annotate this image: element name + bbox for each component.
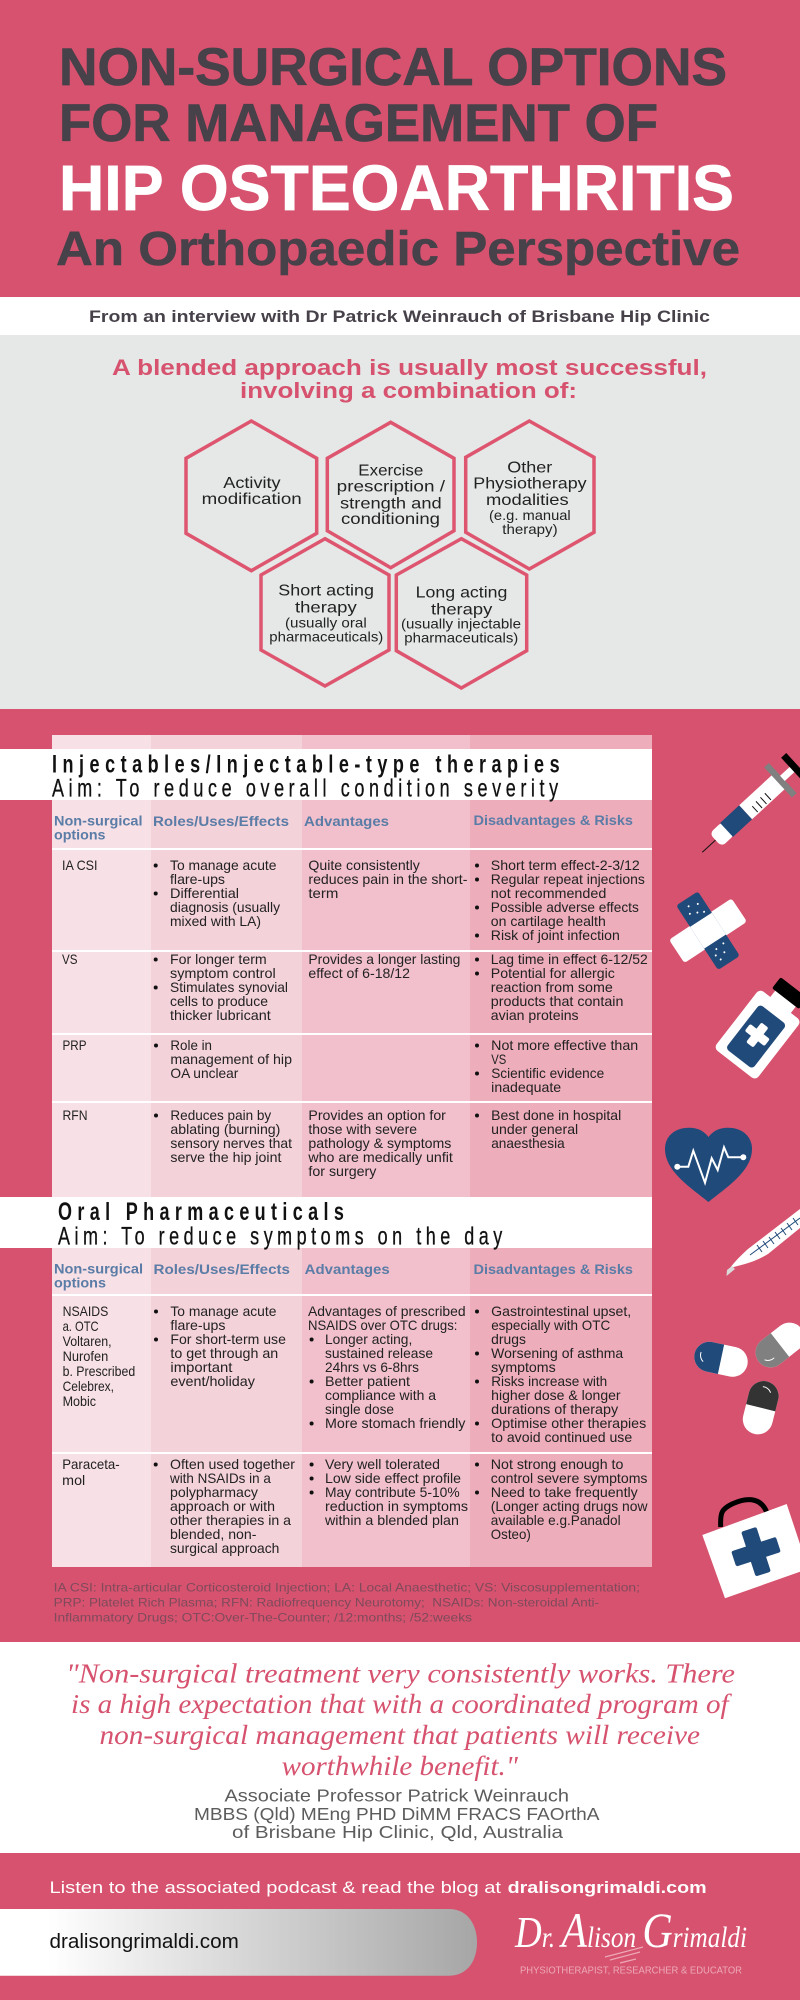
- row: NSAIDS: sustained release: [325, 1346, 433, 1361]
- row: NSAIDS: 24hrs vs 6-8hrs: [325, 1360, 419, 1375]
- table 2 header row: [54, 1261, 633, 1290]
- row: RFN: RFN: [62, 1108, 88, 1123]
- hexagon: other physiotherapy modalities: Physiotherapy: [473, 475, 587, 492]
- table 1 header row: Disadvantages & Risks: [474, 813, 633, 828]
- row: Paracetamol: polypharmacy: [170, 1485, 258, 1500]
- row: VS: symptom control: [170, 966, 276, 981]
- hexagon: exercise prescription: Exercise: [358, 462, 423, 479]
- row: PRP: PRP: [62, 1038, 86, 1053]
- row: PRP: Not more effective than: [491, 1038, 638, 1053]
- title block: [56, 38, 740, 276]
- row: NSAIDS: NSAIDS: [63, 1304, 108, 1319]
- hexagon: exercise prescription: conditioning: [341, 511, 440, 528]
- row: PRP: Role in: [170, 1038, 212, 1053]
- quote attribution: Associate Professor Patrick Weinrauch: [224, 1786, 569, 1806]
- heading: oral pharmaceuticals: Oral Pharmaceuticals: [58, 1197, 344, 1226]
- hexagon: activity modification: modification: [202, 491, 302, 508]
- row: PRP: Scientific evidence: [491, 1066, 605, 1081]
- blended approach heading: involving a combination of:: [240, 378, 577, 403]
- row: NSAIDS: Optimise other therapies: [491, 1416, 646, 1431]
- logo: Dr. Alison Grimaldi: Dr. Alison Grimaldi: [514, 1902, 747, 1958]
- podcast call to action: dralisongrimaldi.com: [508, 1878, 707, 1897]
- row: Paracetamol: other therapies in a: [170, 1513, 291, 1528]
- row: Paracetamol: [62, 1457, 648, 1556]
- row: Paracetamol: Osteo): [491, 1527, 531, 1542]
- row: Paracetamol: blended, non-: [170, 1527, 256, 1542]
- quote attribution: [194, 1786, 600, 1842]
- row: VS: [62, 952, 648, 1023]
- logo: Dr. Alison Grimaldi: PHYSIOTHERAPIST, RESEARCHER & EDUCATOR: [520, 1965, 742, 1977]
- hexagon: exercise prescription: strength and: [340, 495, 442, 512]
- hexagon: short acting therapy: [261, 539, 389, 686]
- table 2 header row: Roles/Uses/Effects: [154, 1262, 290, 1277]
- row: RFN: for surgery: [308, 1164, 376, 1179]
- table 1 header row: Non-surgical: [54, 813, 142, 828]
- icon: thermometer: [726, 1209, 800, 1276]
- row: PRP: management of hip: [170, 1052, 292, 1067]
- row: NSAIDS: Celebrex,: [63, 1379, 114, 1394]
- row: NSAIDS: important: [170, 1360, 233, 1375]
- row: NSAIDS: For short-term use: [170, 1332, 286, 1347]
- row: RFN: Reduces pain by: [170, 1108, 271, 1123]
- row: NSAIDS: Longer acting,: [325, 1332, 412, 1347]
- abbreviations footnote: [54, 1581, 640, 1625]
- table 1 header row: options: [54, 827, 106, 842]
- row: Paracetamol: available e.g.Panadol: [491, 1513, 621, 1528]
- row: Paracetamol: Very well tolerated: [325, 1457, 440, 1472]
- heading: injectables: Aim: To reduce overall condition severity: [52, 774, 558, 802]
- interview banner: [0, 297, 800, 335]
- hexagon: short acting therapy: pharmaceuticals): [269, 628, 383, 644]
- row: RFN: Best done in hospital: [491, 1108, 621, 1123]
- row: Paracetamol: within a blended plan: [324, 1513, 459, 1528]
- row: Paracetamol: May contribute 5-10%: [325, 1485, 460, 1500]
- icon: medicine bottle: [714, 971, 800, 1080]
- row: VS: For longer term: [170, 952, 267, 967]
- hexagon: other physiotherapy modalities: Other: [507, 459, 553, 476]
- row: VS: products that contain: [491, 994, 623, 1009]
- interview banner: From an interview with Dr Patrick Weinrauch of Brisbane Hip Clinic: [89, 307, 710, 326]
- row: IA CSI: flare-ups: [170, 872, 225, 887]
- row: Paracetamol: Paraceta-: [62, 1457, 120, 1472]
- row: IA CSI: To manage acute: [170, 858, 277, 873]
- hexagon: other physiotherapy modalities: modalities: [486, 492, 569, 509]
- row: NSAIDS: especially with OTC: [491, 1318, 610, 1333]
- row: VS: Potential for allergic: [491, 966, 615, 981]
- row: NSAIDS: NSAIDS over OTC drugs:: [308, 1318, 457, 1333]
- row: NSAIDS: durations of therapy: [491, 1402, 618, 1417]
- hexagon: short acting therapy: (usually oral: [285, 614, 367, 630]
- quote text: worthwhile benefit.": [282, 1751, 519, 1781]
- quote text: [66, 1659, 735, 1781]
- hexagon: other physiotherapy modalities: (e.g. manual: [489, 507, 571, 523]
- row: RFN: anaesthesia: [491, 1136, 565, 1151]
- row: IA CSI: Short term effect-2-3/12: [491, 858, 640, 873]
- table 2 header row: Disadvantages & Risks: [474, 1262, 633, 1277]
- icon: syringe: [688, 750, 800, 867]
- row: IA CSI: term: [308, 886, 338, 901]
- quote attribution: of Brisbane Hip Clinic, Qld, Australia: [232, 1822, 563, 1842]
- row: VS: VS: [62, 952, 78, 967]
- pill: dark and white: [740, 1378, 782, 1438]
- row: IA CSI: not recommended: [491, 886, 606, 901]
- title line 3: HIP OSTEOARTHRITIS: [59, 152, 734, 224]
- row: Paracetamol: with NSAIDs in a: [169, 1471, 271, 1486]
- website pill: dralisongrimaldi.com: [50, 1931, 239, 1953]
- icon: heart with ECG line: [665, 1128, 752, 1202]
- table 2 header row: Advantages: [305, 1262, 390, 1277]
- podcast call to action: Listen to the associated podcast & read the blog at: [50, 1878, 501, 1897]
- panel: quote: [0, 1642, 800, 1853]
- table 1 header row: Roles/Uses/Effects: [153, 814, 289, 829]
- row: VS: avian proteins: [491, 1008, 579, 1023]
- table 2 header row: Non-surgical: [54, 1261, 143, 1276]
- row: NSAIDS: Risks increase with: [491, 1374, 607, 1389]
- row: Paracetamol: Need to take frequently: [491, 1485, 638, 1500]
- row: IA CSI: Possible adverse effects: [491, 900, 639, 915]
- row: RFN: serve the hip joint: [170, 1150, 282, 1165]
- row: NSAIDS: symptoms: [491, 1360, 556, 1375]
- row: NSAIDS: drugs: [491, 1332, 526, 1347]
- row: Paracetamol: Often used together: [170, 1457, 295, 1472]
- heading: injectables: Injectables/Injectable-type therapies: [52, 749, 560, 778]
- row: NSAIDS: [63, 1304, 646, 1445]
- hexagon: long acting therapy: [396, 539, 527, 688]
- quote text: is a high expectation that with a coordinated program of: [71, 1689, 732, 1719]
- row: NSAIDS: to get through an: [170, 1346, 278, 1361]
- row: Paracetamol: mol: [62, 1473, 85, 1488]
- podcast call to action: [50, 1878, 707, 1897]
- title line 2: FOR MANAGEMENT OF: [59, 94, 658, 153]
- row: PRP: [62, 1038, 638, 1095]
- icon: pills: [691, 1317, 800, 1438]
- hexagon: exercise prescription: [327, 422, 454, 568]
- table 1 header row: [54, 813, 633, 842]
- quote text: "Non-surgical treatment very consistently works. There: [66, 1659, 735, 1689]
- icon: first aid kit: [702, 1500, 800, 1598]
- row: PRP: inadequate: [491, 1080, 562, 1095]
- website pill: [0, 1909, 477, 1976]
- row: RFN: Provides an option for: [308, 1108, 446, 1123]
- row: NSAIDS: to avoid continued use: [491, 1430, 633, 1445]
- row: RFN: ablating (burning): [170, 1122, 280, 1137]
- row: RFN: sensory nerves that: [170, 1136, 292, 1151]
- row: NSAIDS: Worsening of asthma: [491, 1346, 624, 1361]
- row: NSAIDS: To manage acute: [170, 1304, 277, 1319]
- row: Paracetamol: Not strong enough to: [491, 1457, 624, 1472]
- table 2 header row: options: [54, 1275, 106, 1290]
- hexagon: long acting therapy: (usually injectable: [401, 615, 521, 631]
- abbreviations footnote: PRP: Platelet Rich Plasma; RFN: Radiofrequency Neurotomy; NSAIDs: Non-steroidal Anti-: [54, 1596, 599, 1610]
- row: IA CSI: Differential: [170, 886, 239, 901]
- row: PRP: OA unclear: [170, 1066, 239, 1081]
- row: NSAIDS: Advantages of prescribed: [308, 1304, 466, 1319]
- title line 1: NON-SURGICAL OPTIONS: [59, 38, 727, 97]
- row: VS: cells to produce: [170, 994, 268, 1009]
- hexagon: long acting therapy: therapy: [431, 601, 492, 618]
- blended approach heading: A blended approach is usually most successful,: [112, 355, 707, 380]
- row: NSAIDS: Nurofen: [63, 1349, 108, 1364]
- row: NSAIDS: Gastrointestinal upset,: [491, 1304, 631, 1319]
- hexagon: long acting therapy: pharmaceuticals): [404, 629, 518, 645]
- hexagon: other physiotherapy modalities: [466, 421, 594, 569]
- heading: injectables: [0, 749, 652, 802]
- blended approach heading: [112, 355, 707, 403]
- row: NSAIDS: flare-ups: [170, 1318, 225, 1333]
- row: IA CSI: IA CSI: [62, 858, 98, 873]
- panel: options table background: [52, 735, 652, 1567]
- pill: grey and white: [749, 1317, 800, 1373]
- row: RFN: who are medically unfit: [307, 1150, 453, 1165]
- quote attribution: MBBS (Qld) MEng PHD DiMM FRACS FAOrthA: [194, 1804, 600, 1824]
- row: IA CSI: reduces pain in the short-: [308, 872, 467, 887]
- row: VS: Lag time in effect 6-12/52: [491, 952, 648, 967]
- row: NSAIDS: More stomach friendly: [325, 1416, 465, 1431]
- hexagon: other physiotherapy modalities: therapy): [502, 521, 558, 537]
- heading: oral pharmaceuticals: Aim: To reduce symptoms on the day: [58, 1221, 502, 1250]
- row: VS: reaction from some: [491, 980, 613, 995]
- row: IA CSI: Risk of joint infection: [491, 928, 620, 943]
- row: VS: thicker lubricant: [170, 1008, 271, 1023]
- row: IA CSI: Quite consistently: [308, 858, 420, 873]
- hexagon: short acting therapy: Short acting: [278, 583, 374, 600]
- row: Paracetamol: reduction in symptoms: [325, 1499, 468, 1514]
- row: Paracetamol: (Longer acting drugs now: [491, 1499, 648, 1514]
- hexagon: activity modification: [186, 421, 317, 571]
- row: Paracetamol: Low side effect profile: [325, 1471, 461, 1486]
- row: NSAIDS: higher dose & longer: [491, 1388, 621, 1403]
- row: IA CSI: Regular repeat injections: [491, 872, 645, 887]
- hexagon: short acting therapy: therapy: [295, 599, 357, 616]
- panel: blended approach: [0, 335, 800, 709]
- hexagon: activity modification: Activity: [223, 475, 281, 492]
- row: NSAIDS: event/holiday: [170, 1374, 255, 1389]
- abbreviations footnote: IA CSI: Intra-articular Corticosteroid Injection; LA: Local Anaesthetic; VS: Viscosupplementation;: [54, 1581, 640, 1595]
- heading: oral pharmaceuticals: [0, 1197, 652, 1250]
- row: NSAIDS: Mobic: [63, 1394, 96, 1409]
- row: VS: Stimulates synovial: [170, 980, 288, 995]
- row: VS: effect of 6-18/12: [308, 966, 410, 981]
- row: RFN: under general: [491, 1122, 578, 1137]
- row: Paracetamol: approach or with: [170, 1499, 275, 1514]
- row: NSAIDS: b. Prescribed: [63, 1364, 135, 1379]
- hexagon: long acting therapy: Long acting: [416, 585, 507, 602]
- row: NSAIDS: a. OTC: [63, 1319, 99, 1334]
- table 1 header row: Advantages: [304, 814, 389, 829]
- row: RFN: [62, 1108, 621, 1179]
- row: NSAIDS: Better patient: [325, 1374, 410, 1389]
- row: RFN: pathology & symptoms: [308, 1136, 451, 1151]
- row: IA CSI: [62, 858, 645, 943]
- row: PRP: VS: [491, 1052, 506, 1067]
- abbreviations footnote: Inflammatory Drugs; OTC:Over-The-Counter; /12:months; /52:weeks: [54, 1611, 472, 1625]
- pill: blue and white: [691, 1339, 751, 1380]
- row: RFN: those with severe: [308, 1122, 417, 1137]
- quote text: non-surgical management that patients will receive: [100, 1720, 700, 1750]
- row: NSAIDS: Voltaren,: [63, 1334, 112, 1349]
- row: IA CSI: mixed with LA): [170, 914, 261, 929]
- row: VS: Provides a longer lasting: [308, 952, 460, 967]
- row: NSAIDS: single dose: [325, 1402, 394, 1417]
- title line 4: An Orthopaedic Perspective: [56, 223, 740, 276]
- row: IA CSI: diagnosis (usually: [170, 900, 280, 915]
- row: Paracetamol: surgical approach: [170, 1541, 279, 1556]
- row: IA CSI: on cartilage health: [491, 914, 606, 929]
- hexagon: exercise prescription: prescription /: [337, 478, 446, 495]
- row: Paracetamol: control severe symptoms: [491, 1471, 648, 1486]
- row: NSAIDS: compliance with a: [325, 1388, 436, 1403]
- icon: bandage: [669, 891, 747, 970]
